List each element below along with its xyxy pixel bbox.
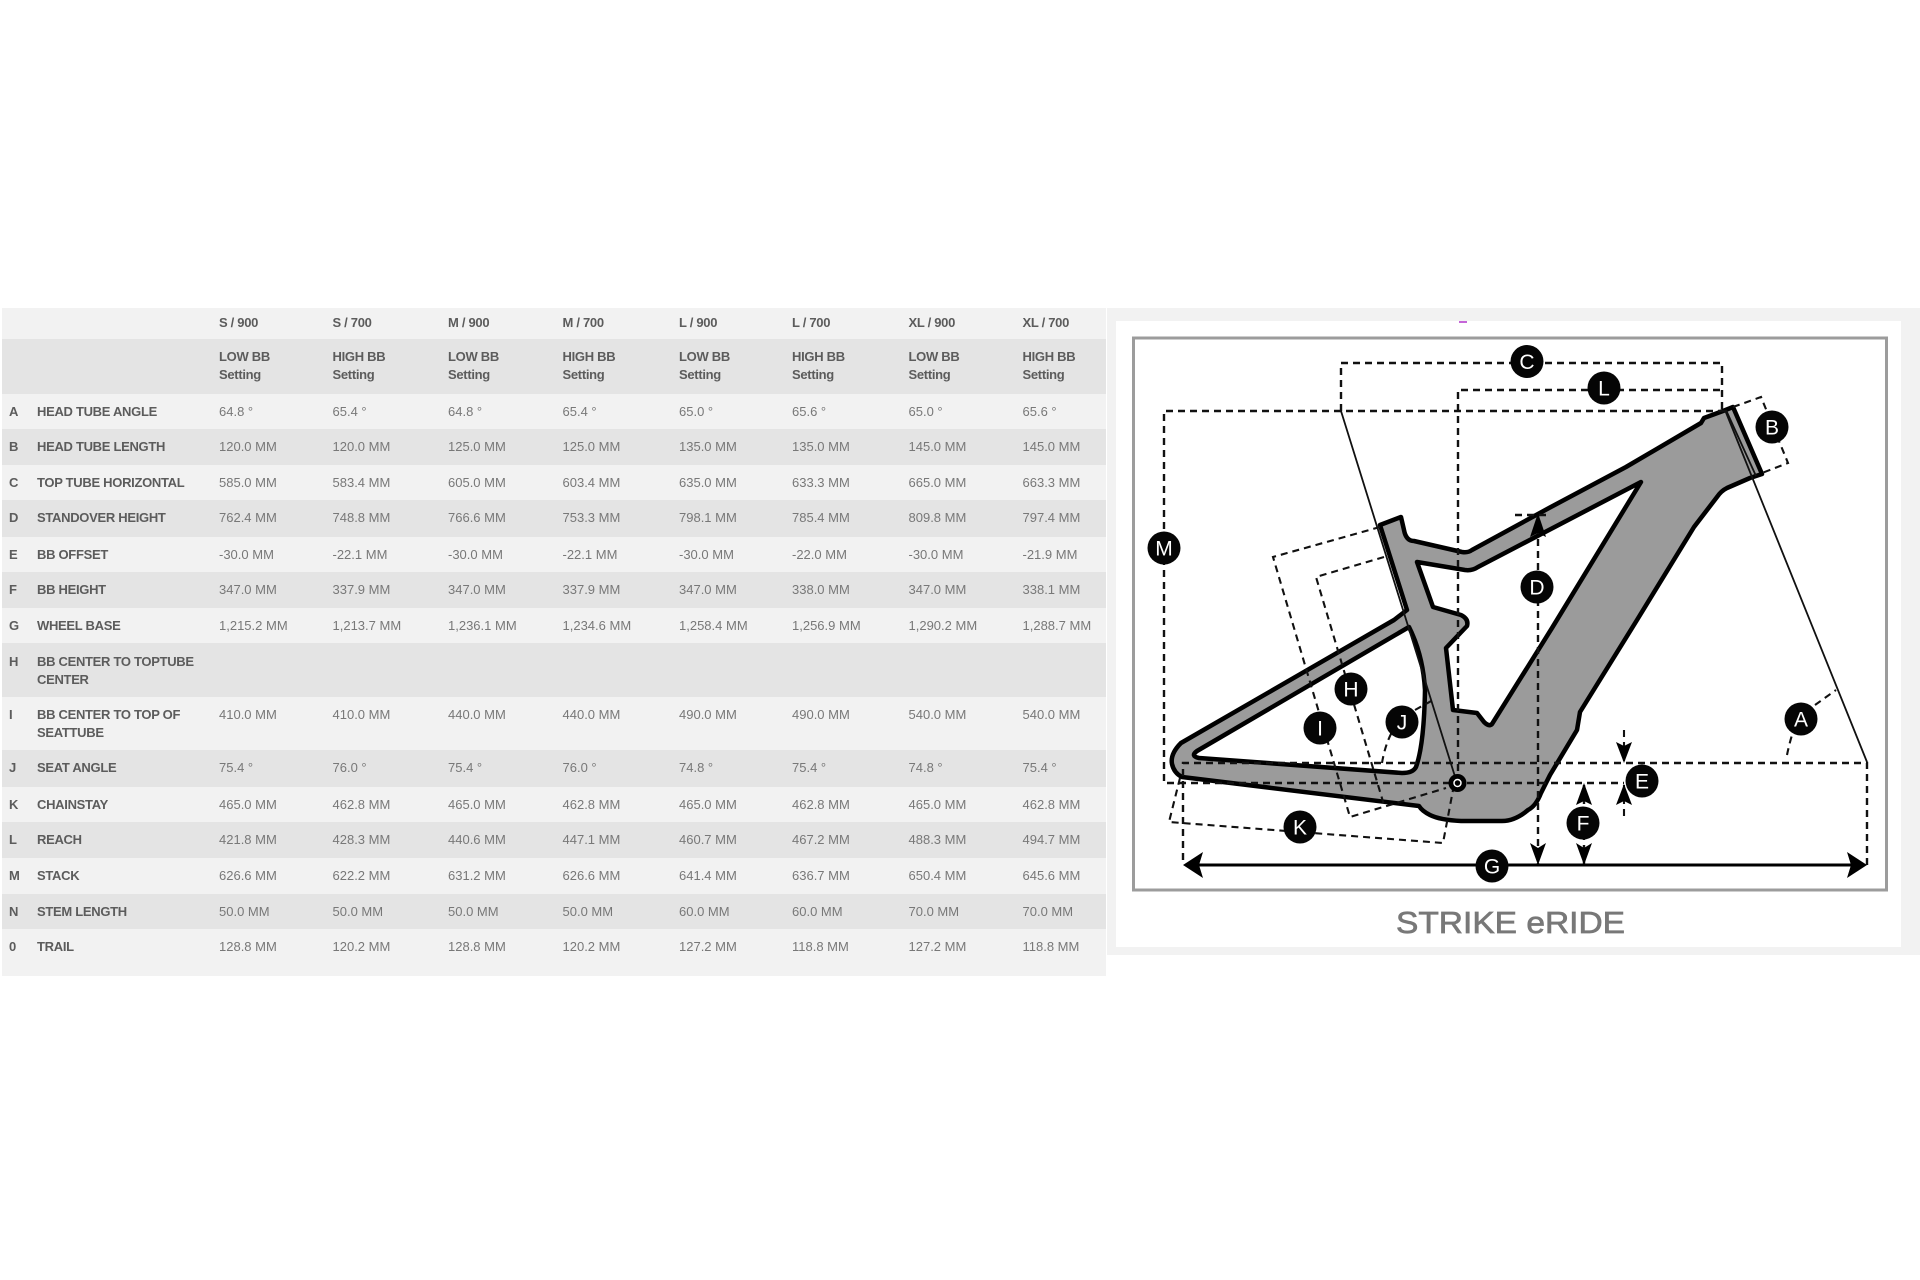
row B: head tube length: 120.0 MM bbox=[332, 439, 390, 454]
header row: sizes bbox=[219, 315, 1069, 330]
header row: BB settings: HIGH BB bbox=[792, 349, 845, 364]
header row: BB settings: Setting bbox=[219, 367, 261, 382]
badge G: G bbox=[1484, 856, 1500, 878]
badge M bbox=[1148, 532, 1180, 564]
row E: BB offset: -30.0 MM bbox=[219, 547, 274, 562]
bottom bracket pivot bbox=[1448, 774, 1466, 792]
row 0: trail bbox=[9, 939, 1079, 954]
row B: head tube length: 135.0 MM bbox=[792, 439, 850, 454]
row L: reach: L bbox=[9, 832, 17, 847]
row A: head tube angle: 64.8 ° bbox=[219, 404, 253, 419]
badge L: L bbox=[1598, 378, 1610, 400]
badge I: I bbox=[1317, 718, 1323, 740]
row B: head tube length: 125.0 MM bbox=[448, 439, 506, 454]
row M: stack: 641.4 MM bbox=[679, 868, 737, 883]
row G: wheel base: 1,290.2 MM bbox=[908, 618, 977, 633]
badge K: K bbox=[1293, 816, 1307, 840]
row L: reach: 440.6 MM bbox=[448, 832, 506, 847]
row K: chainstay: 462.8 MM bbox=[1022, 797, 1080, 812]
row K: chainstay: 462.8 MM bbox=[562, 797, 620, 812]
row D: standover height: 797.4 MM bbox=[1022, 510, 1080, 525]
header row: BB settings: Setting bbox=[908, 367, 950, 382]
row M: stack: 645.6 MM bbox=[1022, 868, 1080, 883]
row A: head tube angle bbox=[9, 404, 1057, 419]
row D: standover height: 748.8 MM bbox=[332, 510, 390, 525]
row B: head tube length: 125.0 MM bbox=[562, 439, 620, 454]
row M: stack bbox=[9, 868, 1080, 883]
header row: BB settings: LOW BB bbox=[679, 349, 730, 364]
row C: top tube horizontal: 635.0 MM bbox=[679, 475, 737, 490]
row D: standover height: 753.3 MM bbox=[562, 510, 620, 525]
row E: BB offset: -22.1 MM bbox=[332, 547, 387, 562]
row H: BB center to toptube center bbox=[2, 643, 1106, 697]
header row: BB settings: HIGH BB bbox=[332, 349, 385, 364]
row N: stem length: N bbox=[9, 904, 18, 919]
badge L bbox=[1588, 372, 1620, 404]
row C: top tube horizontal: C bbox=[9, 475, 18, 490]
row J: seat angle: J bbox=[9, 760, 16, 775]
row I: BB center to top of seattube: 540.0 MM bbox=[1022, 707, 1080, 722]
row I: BB center to top of seattube: 490.0 MM bbox=[792, 707, 850, 722]
header row: BB settings: Setting bbox=[332, 367, 374, 382]
row J: seat angle: 76.0 ° bbox=[332, 760, 367, 775]
row N: stem length: 70.0 MM bbox=[908, 904, 959, 919]
header row: BB settings: Setting bbox=[562, 367, 604, 382]
seat angle arc J bbox=[1382, 700, 1433, 763]
row N: stem length bbox=[2, 894, 1106, 929]
diagram frame border bbox=[1134, 338, 1886, 890]
row D: standover height: D bbox=[9, 510, 18, 525]
row 0: trail: 120.2 MM bbox=[332, 939, 390, 954]
badge F: F bbox=[1577, 812, 1589, 836]
row N: stem length: STEM LENGTH bbox=[37, 904, 127, 919]
steering axis and seat tube lines bbox=[1341, 410, 1867, 783]
badge B bbox=[1756, 410, 1788, 444]
row M: stack: 650.4 MM bbox=[908, 868, 966, 883]
row C: top tube horizontal: 585.0 MM bbox=[219, 475, 277, 490]
row J: seat angle: 76.0 ° bbox=[562, 760, 597, 775]
row E: BB offset: -22.0 MM bbox=[792, 547, 847, 562]
row E: BB offset: -30.0 MM bbox=[679, 547, 734, 562]
header row: BB settings: LOW BB bbox=[219, 349, 270, 364]
badge E bbox=[1626, 764, 1658, 798]
row A: head tube angle: 65.6 ° bbox=[1022, 404, 1057, 419]
row D: standover height: 766.6 MM bbox=[448, 510, 506, 525]
row L: reach: REACH bbox=[37, 832, 82, 847]
row A: head tube angle: 65.4 ° bbox=[332, 404, 367, 419]
row I: BB center to top of seattube: 540.0 MM bbox=[908, 707, 966, 722]
row J: seat angle: 74.8 ° bbox=[908, 760, 943, 775]
row N: stem length: 50.0 MM bbox=[332, 904, 383, 919]
stack dashed lines bbox=[1164, 411, 1725, 783]
row I: BB center to top of seattube: I bbox=[9, 707, 12, 722]
row I: BB center to top of seattube: 490.0 MM bbox=[679, 707, 737, 722]
row H: BB center to toptube center: BB CENTER TO TOPTUBE CENTER bbox=[37, 654, 194, 687]
row 0: trail: 0 bbox=[9, 939, 16, 954]
row L: reach: 488.3 MM bbox=[908, 832, 966, 847]
row C: top tube horizontal: 603.4 MM bbox=[562, 475, 620, 490]
row M: stack: M bbox=[9, 868, 20, 883]
row B: head tube length: 145.0 MM bbox=[1022, 439, 1080, 454]
row A: head tube angle: A bbox=[9, 404, 18, 419]
row B: head tube length: 135.0 MM bbox=[679, 439, 737, 454]
badge H bbox=[1334, 672, 1368, 706]
row H: BB center to toptube center: H bbox=[9, 654, 18, 669]
badge E: E bbox=[1635, 770, 1649, 794]
row I: BB center to top of seattube: 410.0 MM bbox=[332, 707, 390, 722]
badge H: H bbox=[1343, 678, 1359, 702]
header row: BB settings: HIGH BB bbox=[562, 349, 615, 364]
row M: stack: 631.2 MM bbox=[448, 868, 506, 883]
row B: head tube length: HEAD TUBE LENGTH bbox=[37, 439, 165, 454]
row M: stack: 622.2 MM bbox=[332, 868, 390, 883]
row L: reach bbox=[2, 822, 1106, 858]
row C: top tube horizontal: 633.3 MM bbox=[792, 475, 850, 490]
row A: head tube angle: 64.8 ° bbox=[448, 404, 482, 419]
small pink mark bbox=[1459, 321, 1467, 323]
row B: head tube length: B bbox=[9, 439, 18, 454]
header row: BB settings: Setting bbox=[792, 367, 834, 382]
header row: sizes: L / 900 bbox=[679, 315, 717, 330]
row E: BB offset: E bbox=[9, 547, 17, 562]
row G: wheel base bbox=[9, 618, 1091, 633]
row K: chainstay: 462.8 MM bbox=[792, 797, 850, 812]
row J: seat angle: SEAT ANGLE bbox=[37, 760, 116, 775]
row F: BB height: 338.0 MM bbox=[792, 582, 850, 597]
row J: seat angle: 75.4 ° bbox=[448, 760, 482, 775]
row C: top tube horizontal: 665.0 MM bbox=[908, 475, 966, 490]
row E: BB offset: -30.0 MM bbox=[448, 547, 503, 562]
row F: BB height bbox=[2, 572, 1106, 608]
row M: stack: 626.6 MM bbox=[562, 868, 620, 883]
badge C: C bbox=[1519, 351, 1535, 374]
header row: BB settings: Setting bbox=[1022, 367, 1064, 382]
row G: wheel base: 1,234.6 MM bbox=[562, 618, 631, 633]
badge D bbox=[1520, 570, 1554, 604]
row K: chainstay: K bbox=[9, 797, 18, 812]
head tube length dimension B bbox=[1733, 397, 1788, 473]
header row: BB settings bbox=[2, 339, 1106, 394]
row G: wheel base: 1,236.1 MM bbox=[448, 618, 517, 633]
badge K bbox=[1284, 810, 1316, 844]
wheel base G arrow bbox=[1183, 852, 1867, 878]
row I: BB center to top of seattube: 410.0 MM bbox=[219, 707, 277, 722]
panel: geometry table bbox=[2, 308, 1106, 976]
row E: BB offset: -21.9 MM bbox=[1022, 547, 1077, 562]
row M: stack: STACK bbox=[37, 868, 79, 883]
row B: head tube length: 145.0 MM bbox=[908, 439, 966, 454]
row D: standover height: STANDOVER HEIGHT bbox=[37, 510, 166, 525]
row J: seat angle: 74.8 ° bbox=[679, 760, 713, 775]
geometry lines: axles and wheel base verticals bbox=[1183, 763, 1867, 865]
header row: sizes: L / 700 bbox=[792, 315, 830, 330]
header row: sizes: S / 700 bbox=[332, 315, 372, 330]
row 0: trail: 128.8 MM bbox=[219, 939, 277, 954]
header row: sizes: S / 900 bbox=[219, 315, 258, 330]
row G: wheel base: 1,258.4 MM bbox=[679, 618, 748, 633]
chainstay dimension K bbox=[1169, 778, 1453, 843]
row K: chainstay: CHAINSTAY bbox=[37, 797, 108, 812]
row F: BB height: BB HEIGHT bbox=[37, 582, 106, 597]
row J: seat angle: 75.4 ° bbox=[1022, 760, 1057, 775]
header row: BB settings: LOW BB bbox=[908, 349, 959, 364]
row G: wheel base: G bbox=[9, 618, 19, 633]
row 0: trail: 120.2 MM bbox=[562, 939, 620, 954]
header row: BB settings: Setting bbox=[679, 367, 721, 382]
header row: sizes: XL / 700 bbox=[1022, 315, 1069, 330]
badge G bbox=[1476, 850, 1508, 882]
row F: BB height: 337.9 MM bbox=[562, 582, 620, 597]
row K: chainstay: 462.8 MM bbox=[332, 797, 390, 812]
BB offset E dimension and arrows bbox=[1616, 730, 1632, 817]
row L: reach: 460.7 MM bbox=[679, 832, 737, 847]
row F: BB height: 347.0 MM bbox=[219, 582, 277, 597]
row E: BB offset: -30.0 MM bbox=[908, 547, 963, 562]
row N: stem length: 50.0 MM bbox=[448, 904, 499, 919]
row E: BB offset: BB OFFSET bbox=[37, 547, 108, 562]
row A: head tube angle: 65.4 ° bbox=[562, 404, 597, 419]
row G: wheel base: 1,215.2 MM bbox=[219, 618, 288, 633]
model name: STRIKE eRIDE bbox=[1396, 905, 1625, 940]
row C: top tube horizontal bbox=[9, 475, 1080, 490]
row A: head tube angle: 65.6 ° bbox=[792, 404, 826, 419]
row K: chainstay: 465.0 MM bbox=[219, 797, 277, 812]
row A: head tube angle: 65.0 ° bbox=[908, 404, 943, 419]
badge J: J bbox=[1397, 712, 1407, 734]
standover D dimension and arrows bbox=[1515, 513, 1546, 865]
row E: BB offset bbox=[9, 547, 1077, 562]
header row: BB settings: LOW BB bbox=[448, 349, 499, 364]
row 0: trail: 118.8 MM bbox=[1022, 939, 1079, 954]
row A: head tube angle: HEAD TUBE ANGLE bbox=[37, 404, 157, 419]
row M: stack: 636.7 MM bbox=[792, 868, 850, 883]
row K: chainstay bbox=[9, 797, 1080, 812]
row D: standover height: 809.8 MM bbox=[908, 510, 966, 525]
row L: reach: 467.2 MM bbox=[792, 832, 850, 847]
row I: BB center to top of seattube: 440.0 MM bbox=[562, 707, 620, 722]
row I: BB center to top of seattube: 440.0 MM bbox=[448, 707, 506, 722]
row J: seat angle: 75.4 ° bbox=[219, 760, 253, 775]
row C: top tube horizontal: TOP TUBE HORIZONTAL bbox=[37, 475, 184, 490]
row I: BB center to top of seattube: BB CENTER TO TOP OF SEATTUBE bbox=[37, 707, 180, 740]
geometry lines: top tube and reach bbox=[1164, 363, 1725, 783]
row B: head tube length: 120.0 MM bbox=[219, 439, 277, 454]
header row: BB settings: HIGH BB bbox=[1022, 349, 1075, 364]
badge F bbox=[1566, 806, 1600, 840]
row J: seat angle bbox=[2, 750, 1106, 787]
row G: wheel base: 1,288.7 MM bbox=[1022, 618, 1091, 633]
badge C bbox=[1510, 345, 1544, 378]
row G: wheel base: 1,213.7 MM bbox=[332, 618, 401, 633]
row C: top tube horizontal: 605.0 MM bbox=[448, 475, 506, 490]
row F: BB height: 347.0 MM bbox=[908, 582, 966, 597]
row N: stem length: 60.0 MM bbox=[679, 904, 730, 919]
row L: reach: 428.3 MM bbox=[332, 832, 390, 847]
row E: BB offset: -22.1 MM bbox=[562, 547, 617, 562]
diagram background panel bbox=[1107, 308, 1920, 955]
row D: standover height: 798.1 MM bbox=[679, 510, 737, 525]
row N: stem length: 50.0 MM bbox=[219, 904, 270, 919]
row 0: trail: 127.2 MM bbox=[679, 939, 737, 954]
header row: BB settings: Setting bbox=[448, 367, 490, 382]
seat tube dimensions H and I bbox=[1273, 527, 1446, 817]
row C: top tube horizontal: 583.4 MM bbox=[332, 475, 390, 490]
header row: sizes: M / 900 bbox=[448, 315, 489, 330]
row N: stem length: 60.0 MM bbox=[792, 904, 843, 919]
row D: standover height: 762.4 MM bbox=[219, 510, 277, 525]
row L: reach: 421.8 MM bbox=[219, 832, 277, 847]
row D: standover height: 785.4 MM bbox=[792, 510, 850, 525]
row N: stem length: 50.0 MM bbox=[562, 904, 613, 919]
row B: head tube length bbox=[2, 429, 1106, 465]
head tube stripe bbox=[1726, 410, 1756, 476]
row K: chainstay: 465.0 MM bbox=[908, 797, 966, 812]
row 0: trail: 128.8 MM bbox=[448, 939, 506, 954]
header row: sizes: XL / 900 bbox=[908, 315, 955, 330]
row J: seat angle: 75.4 ° bbox=[792, 760, 826, 775]
row F: BB height: 347.0 MM bbox=[679, 582, 737, 597]
badge A: A bbox=[1794, 708, 1808, 732]
row F: BB height: 337.9 MM bbox=[332, 582, 390, 597]
bike frame silhouette bbox=[1172, 407, 1762, 821]
row F: BB height: F bbox=[9, 582, 17, 597]
row G: wheel base: 1,256.9 MM bbox=[792, 618, 861, 633]
header row: sizes: M / 700 bbox=[562, 315, 604, 330]
row I: BB center to top of seattube bbox=[9, 707, 1080, 740]
row M: stack: 626.6 MM bbox=[219, 868, 277, 883]
row C: top tube horizontal: 663.3 MM bbox=[1022, 475, 1080, 490]
row L: reach: 447.1 MM bbox=[562, 832, 620, 847]
badge M: M bbox=[1155, 538, 1173, 560]
row K: chainstay: 465.0 MM bbox=[448, 797, 506, 812]
row 0: trail: 118.8 MM bbox=[792, 939, 849, 954]
row 0: trail: 127.2 MM bbox=[908, 939, 966, 954]
row F: BB height: 347.0 MM bbox=[448, 582, 506, 597]
badge J bbox=[1386, 706, 1418, 738]
row K: chainstay: 465.0 MM bbox=[679, 797, 737, 812]
row D: standover height bbox=[2, 500, 1106, 537]
row G: wheel base: WHEEL BASE bbox=[37, 618, 120, 633]
badge I bbox=[1304, 712, 1336, 744]
head angle arc A bbox=[1787, 690, 1836, 755]
BB height F dimension and arrows bbox=[1576, 783, 1592, 865]
row F: BB height: 338.1 MM bbox=[1022, 582, 1080, 597]
badge B: B bbox=[1765, 416, 1779, 440]
badge A bbox=[1784, 702, 1818, 736]
row L: reach: 494.7 MM bbox=[1022, 832, 1080, 847]
row A: head tube angle: 65.0 ° bbox=[679, 404, 713, 419]
row 0: trail: TRAIL bbox=[37, 939, 74, 954]
row N: stem length: 70.0 MM bbox=[1022, 904, 1073, 919]
badge D: D bbox=[1529, 576, 1545, 600]
